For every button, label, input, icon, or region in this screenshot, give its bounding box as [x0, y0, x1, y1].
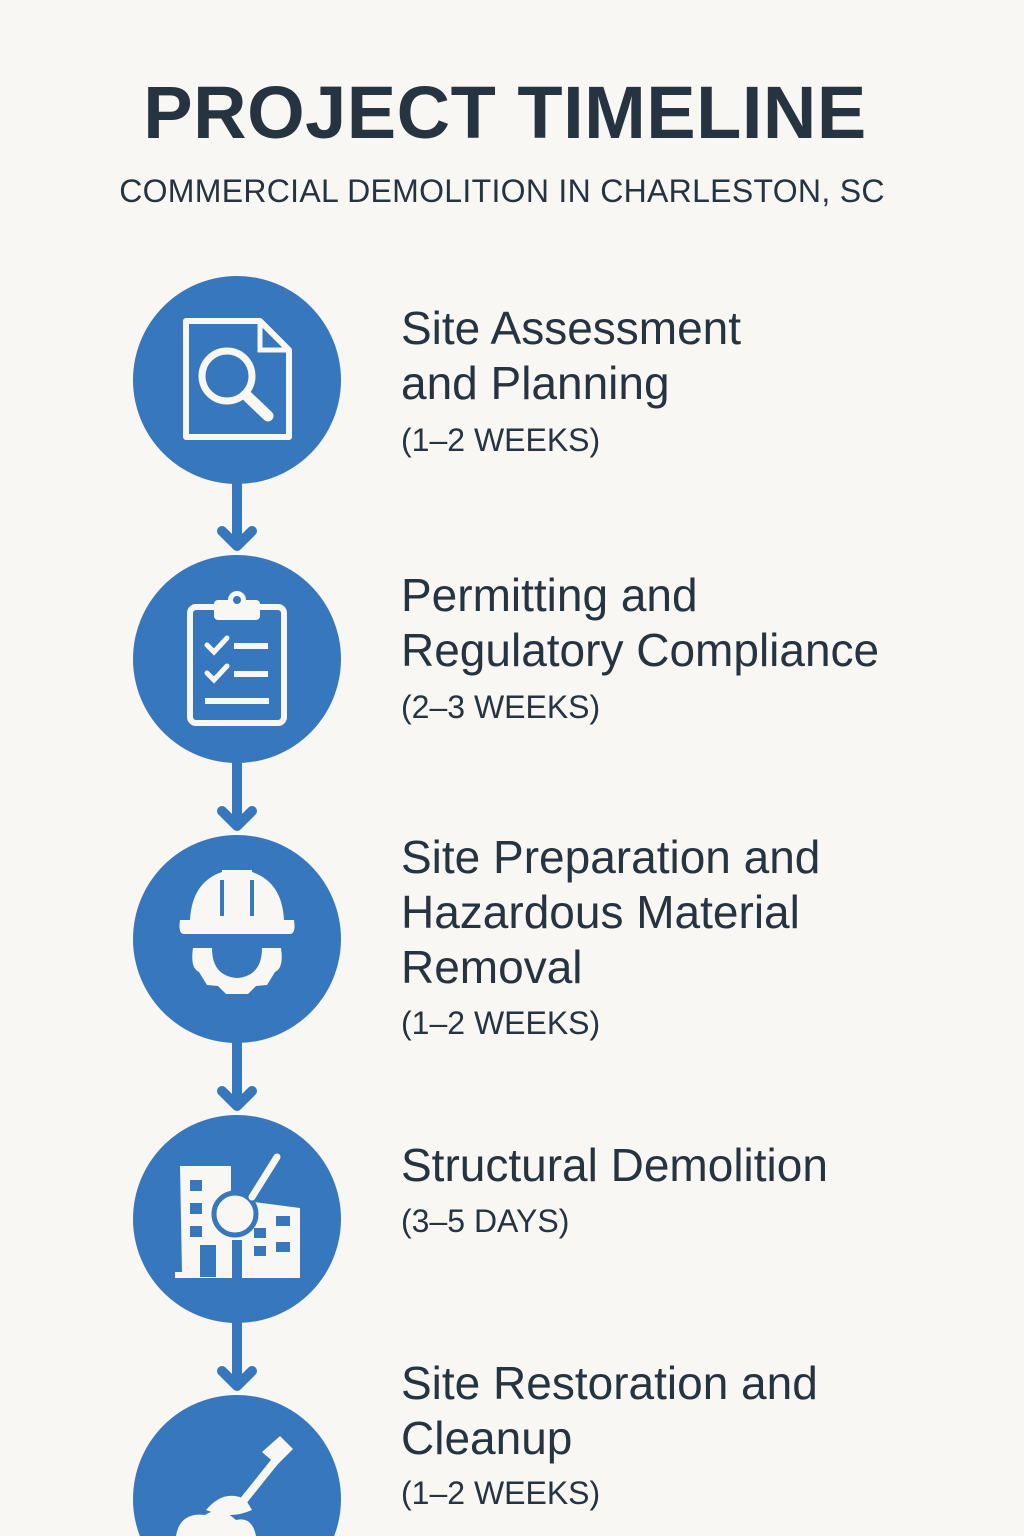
- step 5 heading: Site Restoration and: [401, 1357, 818, 1409]
- step 2 duration: (2–3 WEEKS): [401, 689, 600, 725]
- step 4 text: [401, 1139, 828, 1239]
- arrow 4: [222, 1320, 252, 1386]
- arrow 3: [222, 1040, 252, 1106]
- step 1 heading: and Planning: [401, 357, 670, 409]
- icon: shovel: [133, 1395, 341, 1536]
- step 3 heading: Hazardous Material: [401, 886, 800, 938]
- arrow 2: [222, 760, 252, 826]
- step 1 heading: [401, 302, 741, 409]
- step 3 heading: Site Preparation and: [401, 831, 820, 883]
- step 1 text: [401, 302, 741, 458]
- step 2 text: [401, 569, 879, 725]
- step 2 heading: Permitting and: [401, 569, 698, 621]
- step 2 heading: [401, 569, 879, 676]
- step 3 text: [401, 831, 820, 1041]
- step 4 duration: (3–5 DAYS): [401, 1203, 569, 1239]
- arrow 1: [222, 480, 252, 546]
- step 5 heading: [401, 1357, 818, 1464]
- step 4 heading: Structural Demolition: [401, 1139, 828, 1191]
- step 2 heading: Regulatory Compliance: [401, 624, 879, 676]
- step 5 heading: Cleanup: [401, 1412, 572, 1464]
- step 1 duration: (1–2 WEEKS): [401, 422, 600, 458]
- step 3 heading: Removal: [401, 941, 583, 993]
- subtitle: COMMERCIAL DEMOLITION IN CHARLESTON, SC: [119, 173, 885, 209]
- title: PROJECT TIMELINE: [143, 71, 867, 154]
- icon: building demolition: [133, 1115, 341, 1323]
- icon: clipboard checklist: [133, 555, 341, 763]
- icon: document search: [133, 276, 341, 484]
- step 5 duration: (1–2 WEEKS): [401, 1475, 600, 1511]
- step 3 heading: [401, 831, 820, 993]
- step 3 duration: (1–2 WEEKS): [401, 1005, 600, 1041]
- icon: hard hat: [133, 835, 341, 1043]
- step 5 text: [401, 1357, 818, 1511]
- step 1 heading: Site Assessment: [401, 302, 741, 354]
